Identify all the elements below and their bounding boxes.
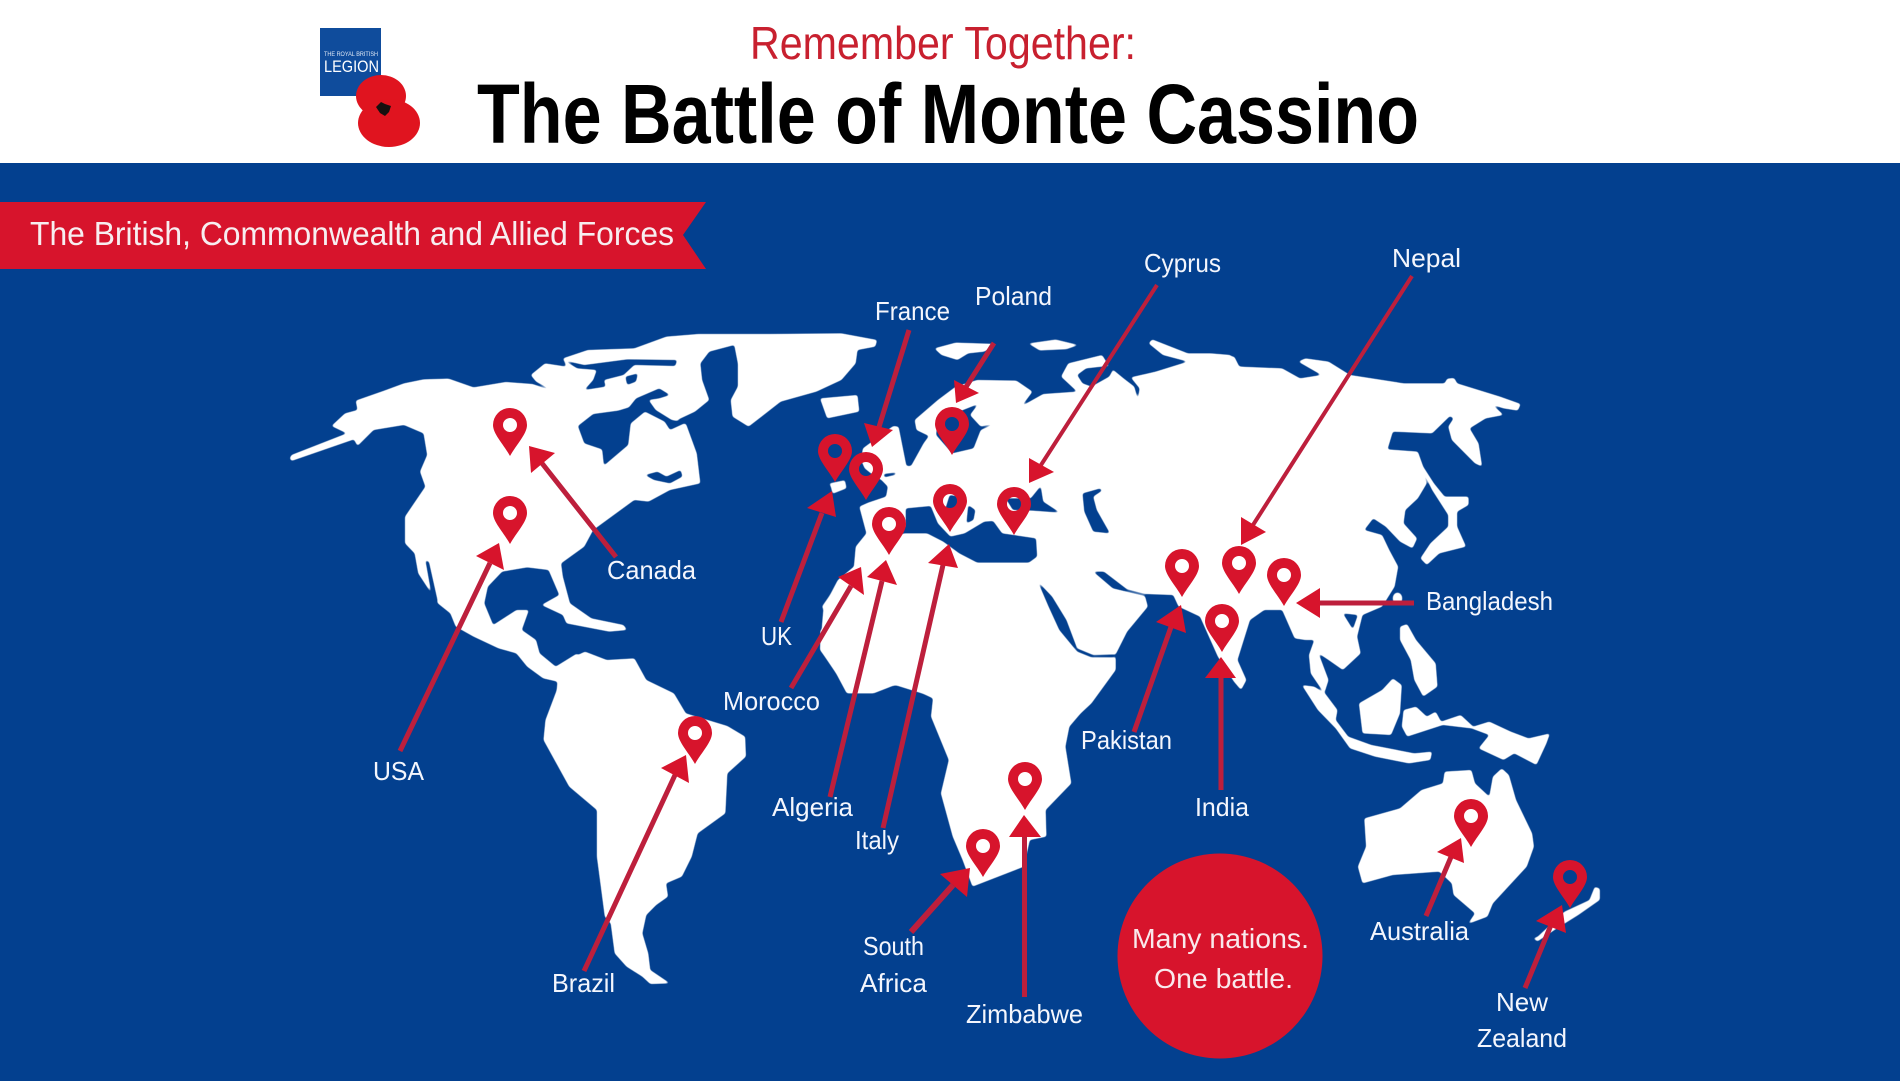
label: Nepal: Nepal bbox=[1392, 243, 1461, 273]
logo: Royal British Legion panel: LEGION bbox=[324, 57, 379, 76]
pin: Italy bbox=[933, 484, 967, 532]
label: Canada: Canada bbox=[607, 555, 697, 585]
logo: Royal British Legion panel bbox=[320, 28, 381, 96]
arrow: Australia bbox=[1426, 838, 1464, 916]
map: East Asia and Indonesia bbox=[1100, 353, 1550, 765]
pin: USA bbox=[493, 496, 527, 544]
callout: Many nations. One battle. bbox=[1118, 854, 1322, 1058]
label: India: India bbox=[1195, 792, 1250, 822]
pin: Poland bbox=[935, 407, 969, 455]
callout: Many nations. One battle.: One battle. bbox=[1154, 963, 1293, 994]
pin: India bbox=[1205, 604, 1239, 652]
pin: Brazil bbox=[678, 716, 712, 764]
arrow: India bbox=[1205, 657, 1236, 790]
logo: Royal British Legion panel: THE ROYAL BRITISH bbox=[324, 52, 378, 58]
pin: UK bbox=[818, 434, 852, 482]
pin: Canada bbox=[493, 408, 527, 456]
label: Zimbabwe: Zimbabwe bbox=[966, 999, 1083, 1029]
label: Brazil: Brazil bbox=[552, 968, 615, 998]
arrow: Nepal bbox=[1241, 276, 1412, 545]
pin: Cyprus bbox=[997, 487, 1031, 535]
world map bbox=[260, 310, 1640, 1070]
label: France: France bbox=[875, 296, 950, 326]
callouts: nations bbox=[373, 243, 1587, 1053]
label: South Africa: Africa bbox=[860, 968, 928, 998]
pin: Australia bbox=[1454, 799, 1488, 847]
label: Algeria: Algeria bbox=[772, 792, 854, 822]
arrow: South Africa bbox=[911, 868, 970, 932]
map: Australia and New Zealand bbox=[1358, 768, 1600, 942]
arrow: France bbox=[864, 330, 909, 447]
arrow: Pakistan bbox=[1134, 605, 1186, 732]
label: Cyprus: Cyprus bbox=[1144, 248, 1221, 278]
label: Bangladesh: Bangladesh bbox=[1426, 586, 1553, 616]
label: Australia: Australia bbox=[1370, 916, 1470, 946]
ribbon banner bbox=[0, 202, 706, 269]
arrow: Poland bbox=[954, 343, 994, 403]
pin: France bbox=[849, 452, 883, 500]
pin: New Zealand bbox=[1553, 860, 1587, 908]
icon: poppy bbox=[356, 75, 420, 147]
arrow: Cyprus bbox=[1029, 285, 1157, 483]
arrow: UK bbox=[781, 491, 836, 622]
callout: Many nations. One battle.: Many nations. bbox=[1132, 923, 1309, 954]
label: Italy: Italy bbox=[855, 825, 899, 855]
subtitle: Remember Together: bbox=[750, 17, 1136, 69]
arrow: Brazil bbox=[584, 755, 689, 971]
label: New Zealand: Zealand bbox=[1477, 1023, 1567, 1053]
label: Pakistan: Pakistan bbox=[1081, 725, 1172, 755]
map: South America and Africa bbox=[516, 630, 1115, 984]
arrow: Zimbabwe bbox=[1009, 815, 1041, 997]
arrow: Bangladesh bbox=[1296, 588, 1414, 618]
arrow: Canada bbox=[529, 446, 616, 557]
pin: Pakistan bbox=[1165, 549, 1199, 597]
arrow: New Zealand bbox=[1525, 905, 1566, 988]
label: USA: USA bbox=[373, 756, 425, 786]
map: Europe, West Asia and North Africa bbox=[820, 339, 1288, 720]
arrow: Algeria bbox=[830, 560, 897, 797]
ribbon banner: The British, Commonwealth and Allied Forces bbox=[30, 215, 674, 252]
pin: Bangladesh bbox=[1267, 558, 1301, 606]
label: UK: UK bbox=[761, 621, 793, 651]
pin: Morocco bbox=[872, 507, 906, 555]
map: North America and Greenland bbox=[290, 333, 877, 700]
arrow: Italy bbox=[883, 544, 958, 828]
pin: Nepal bbox=[1222, 546, 1256, 594]
pin: South Africa bbox=[966, 829, 1000, 877]
header: logo bbox=[320, 28, 420, 147]
label: Poland: Poland bbox=[975, 281, 1052, 311]
label: South Africa: South bbox=[863, 931, 924, 961]
arrow: Morocco bbox=[791, 567, 864, 688]
arrow: USA bbox=[400, 543, 504, 751]
title: The Battle of Monte Cassino bbox=[477, 67, 1419, 161]
label: Morocco: Morocco bbox=[723, 686, 820, 716]
pin: Zimbabwe bbox=[1008, 762, 1042, 810]
label: New Zealand: New bbox=[1496, 987, 1548, 1017]
